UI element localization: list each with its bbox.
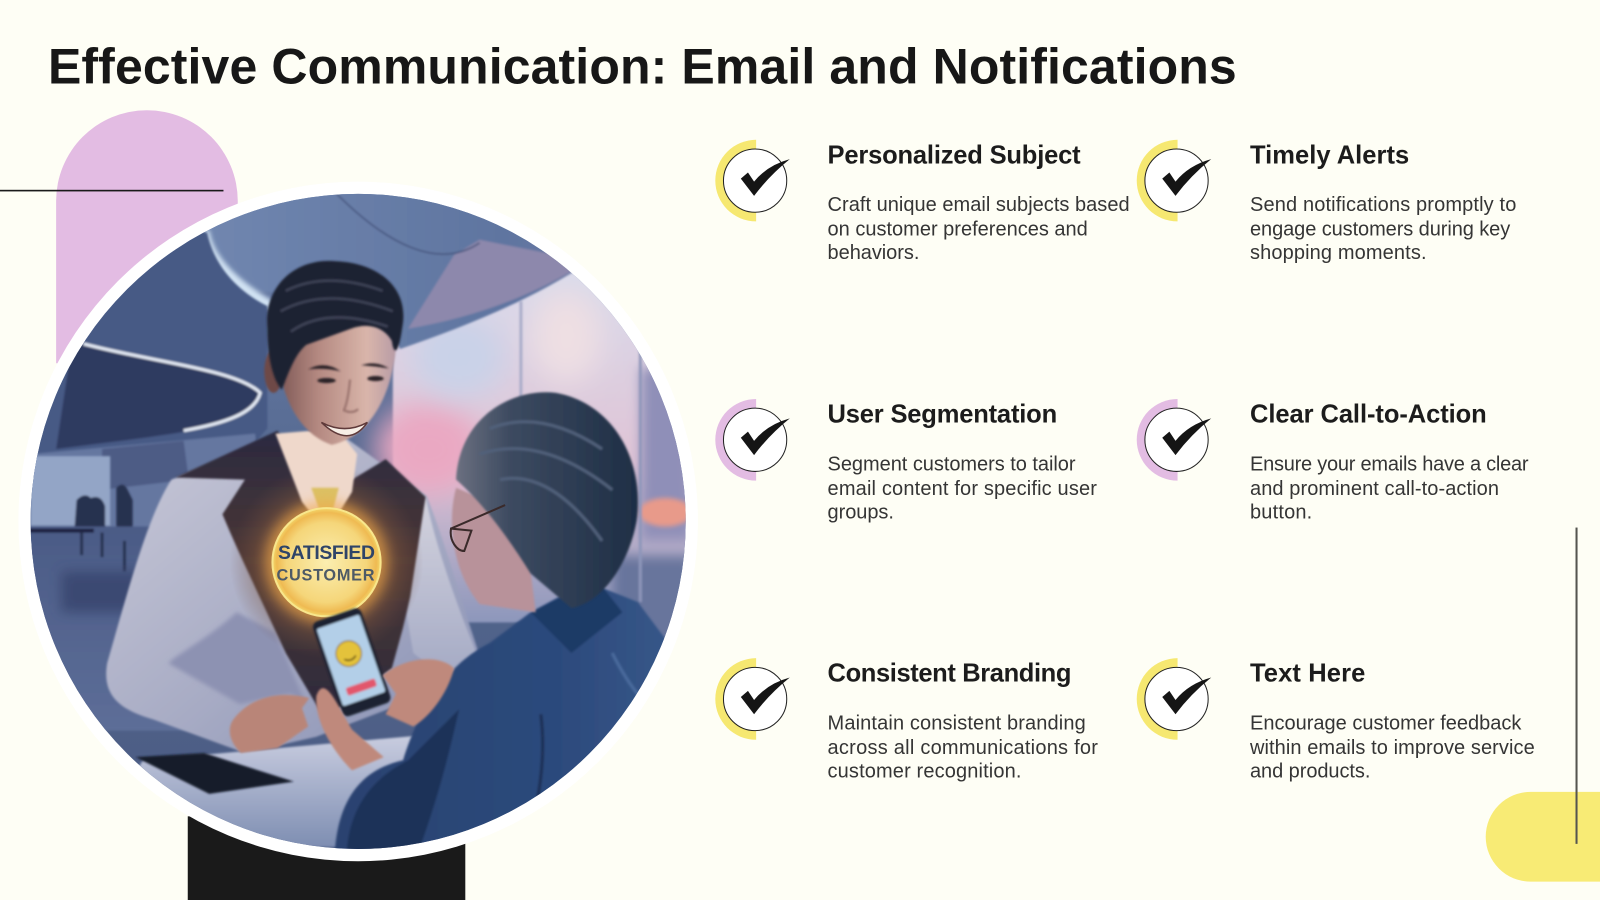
item: Text Here: Encourage customer feedback: [1250, 713, 1522, 735]
check icon: pink: [1137, 399, 1211, 481]
item: Consistent Branding: customer recognition.: [828, 761, 1021, 783]
background office windows and people: [30, 455, 180, 732]
item: Consistent Branding: Maintain consistent branding: [828, 713, 1086, 735]
man's jacket: [106, 439, 482, 753]
man's hand: [230, 695, 309, 753]
check icon: yellow: [1137, 140, 1211, 221]
item: Timely Alerts: [1137, 140, 1516, 264]
jacket lapels: [176, 431, 426, 718]
decorative yellow pill: [1486, 792, 1600, 882]
item: Clear Call-to-Action: [1137, 399, 1529, 523]
check icon: yellow: [715, 140, 790, 221]
neck and face: [282, 324, 397, 446]
nose shadow: [344, 380, 358, 412]
badge: satisfied customer: SATISFIED: [278, 542, 375, 564]
eyes and brows: [308, 363, 389, 383]
item: Timely Alerts: shopping moments.: [1250, 242, 1427, 264]
glasses: [451, 505, 505, 551]
tie: [310, 486, 340, 508]
item: User Segmentation: User Segmentation: [828, 400, 1057, 428]
ceiling: [202, 194, 572, 350]
ear: [264, 350, 283, 393]
title: Effective Communication: Email and Notifications: [48, 39, 1237, 95]
customer's hair: [456, 392, 638, 608]
left ceiling band: [20, 228, 267, 541]
customer's jacket: [334, 588, 665, 849]
right jacket panel: [406, 498, 476, 668]
item: Timely Alerts: Send notifications promptly to: [1250, 194, 1516, 216]
item: Consistent Branding: across all communications for: [828, 737, 1098, 759]
decorative horizontal line: [0, 190, 223, 191]
item: Personalized Subject: Craft unique email subjects based: [828, 194, 1130, 216]
item: Timely Alerts: Timely Alerts: [1250, 141, 1409, 169]
item: Personalized Subject: on customer preferences and: [828, 219, 1088, 241]
item: Clear Call-to-Action: and prominent call-to-action: [1250, 478, 1499, 500]
item: Clear Call-to-Action: Ensure your emails have a clear: [1250, 453, 1529, 475]
item: Text Here: and products.: [1250, 761, 1370, 783]
check icon: yellow: [715, 658, 790, 740]
item: Consistent Branding: [715, 658, 1098, 783]
item: Text Here: [1137, 658, 1535, 783]
decorative black block: [188, 816, 465, 900]
decorative pink arch: [56, 110, 238, 367]
smile: [321, 422, 367, 436]
check icon: yellow: [1137, 658, 1211, 740]
item: User Segmentation: email content for specific user: [828, 478, 1097, 500]
badge: satisfied customer: CUSTOMER: [277, 567, 375, 585]
customer's hands: [316, 659, 454, 770]
desk: [139, 735, 413, 848]
item: Personalized Subject: Personalized Subject: [828, 141, 1081, 169]
item: Clear Call-to-Action: Clear Call-to-Action: [1250, 400, 1487, 428]
check icon: pink: [715, 399, 790, 481]
item: Timely Alerts: engage customers during key: [1250, 219, 1510, 241]
tablet: [136, 753, 294, 794]
shirt: [274, 430, 358, 510]
hair: [267, 261, 403, 390]
item: Text Here: Text Here: [1250, 660, 1365, 688]
item: User Segmentation: [715, 399, 1097, 523]
item: Personalized Subject: [715, 140, 1130, 264]
badge: satisfied customer: [265, 501, 388, 623]
item: Text Here: within emails to improve service: [1249, 737, 1535, 759]
phone: [311, 607, 392, 718]
item: User Segmentation: groups.: [828, 501, 894, 523]
chest glow: [234, 474, 420, 650]
sleeve shadow: [168, 612, 306, 704]
item: Clear Call-to-Action: button.: [1250, 501, 1312, 523]
item: User Segmentation: Segment customers to tailor: [828, 453, 1076, 475]
item: Consistent Branding: Consistent Branding: [828, 660, 1071, 688]
photo circle: satisfied customer illustration: [18, 173, 714, 878]
item: Personalized Subject: behaviors.: [828, 242, 919, 264]
decorative vertical line: [1576, 528, 1578, 844]
window city view: [376, 265, 699, 648]
customer's face: [452, 488, 536, 612]
